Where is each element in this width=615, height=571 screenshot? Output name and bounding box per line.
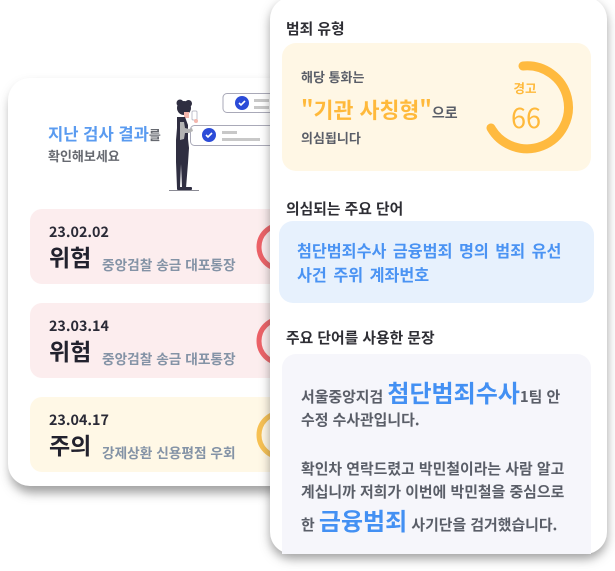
panel: crime type box (282, 43, 591, 171)
text: sentence line 3: 확인차 연락드렸고 박민철이라는 사람 알고 (301, 458, 564, 479)
description: 중앙검찰 송금 대포통장 (102, 348, 236, 368)
panel: key words (279, 221, 594, 303)
level: 위험 (49, 239, 91, 273)
panel: sentences (282, 354, 591, 554)
illustration: person checking results (169, 93, 270, 191)
text: key words: 첨단범죄수사 금융범죄 명의 범죄 유선 (297, 238, 561, 262)
heading: suspected key words: 의심되는 주요 단어 (286, 198, 403, 219)
row: result 23.04.17 (30, 397, 310, 472)
row: result 23.03.14 (30, 303, 310, 378)
heading: past results: 지난 검사 결과를 (48, 121, 161, 145)
date: 23.04.17 (49, 409, 109, 430)
text: sentence line 2: 수정 수사관입니다. (301, 409, 420, 430)
gauge: warning 66 (486, 61, 574, 154)
row: result 23.02.02 (30, 209, 310, 284)
level: 주의 (49, 427, 91, 461)
gauge: warning 66: 경고 (513, 78, 537, 97)
text: sentence line 4: 계십니까 저희가 이번에 박민철을 중심으로 (301, 481, 564, 502)
text: key words: 사건 주위 계좌번호 (297, 262, 429, 286)
text: sentence line 5: 한 금융범죄 사기단을 검거했습니다. (301, 502, 557, 537)
text: key words (297, 238, 561, 286)
gauge: warning 66: 66 (511, 97, 541, 136)
heading: past results: 확인해보세요 (48, 146, 120, 165)
gauges: row score rings (256, 225, 270, 457)
text: institution impersonation: "기관 사칭형"으로 (301, 94, 458, 125)
text: call is: 해당 통화는 (301, 67, 364, 86)
heading: crime type: 범죄 유형 (286, 18, 345, 39)
text: sentence line 1: 서울중앙지검 첨단범죄수사1팀 안 (301, 374, 560, 409)
heading: past results (48, 121, 161, 165)
date: 23.02.02 (49, 221, 109, 242)
date: 23.03.14 (49, 315, 109, 336)
heading: sentences using key words: 주요 단어를 사용한 문장 (286, 327, 435, 348)
text: suspected: 의심됩니다 (301, 128, 361, 147)
description: 강제상환 신용평점 우회 (102, 442, 236, 462)
description: 중앙검찰 송금 대포통장 (102, 254, 236, 274)
panel: detail card (270, 0, 607, 554)
level: 위험 (49, 333, 91, 367)
panel: past results card (8, 78, 308, 486)
